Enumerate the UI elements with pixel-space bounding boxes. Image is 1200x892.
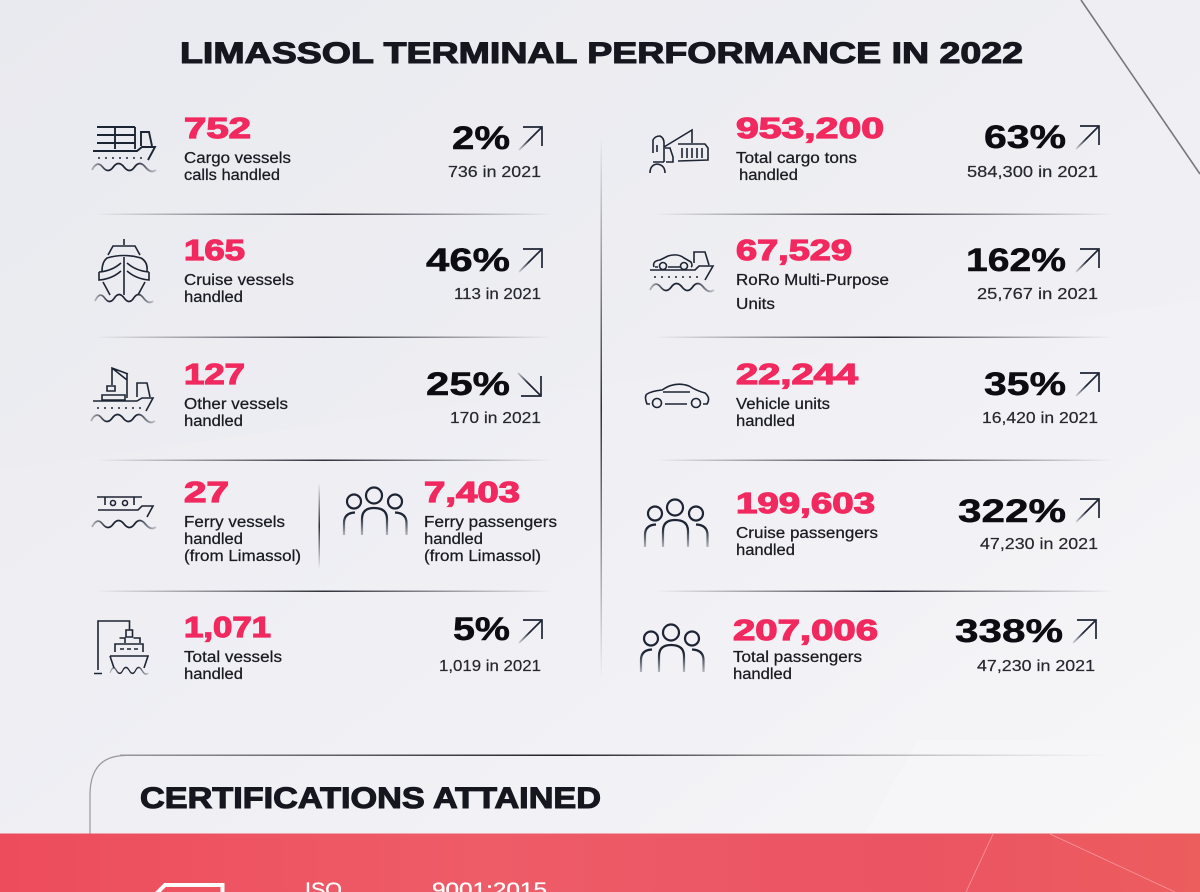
stat: vehicle units: handled bbox=[736, 413, 795, 430]
stat: cruise vessels: 46% bbox=[426, 242, 510, 278]
arrow: up bbox=[1076, 373, 1099, 396]
icon: ferry bbox=[92, 497, 156, 528]
stat: vehicle units: 35% bbox=[984, 366, 1066, 402]
arrow: up bbox=[1076, 126, 1099, 149]
stat: cargo vessels: Cargo vessels bbox=[184, 150, 291, 167]
stat: roro units: Units bbox=[736, 296, 775, 313]
icon: car bbox=[646, 384, 709, 408]
red band bbox=[0, 834, 1200, 892]
arrow: up bbox=[519, 620, 542, 643]
stat: total cargo tons: handled bbox=[739, 167, 798, 184]
stat: other vessels: 170 in 2021 bbox=[450, 410, 541, 427]
stat: roro units: 162% bbox=[966, 242, 1066, 278]
icon: people bbox=[645, 500, 708, 547]
stat: other vessels: Other vessels bbox=[184, 396, 288, 413]
stat: total passengers: Total passengers bbox=[733, 649, 862, 666]
icon: roro ship with car bbox=[650, 252, 714, 291]
stat: ferry passengers: 7,403 bbox=[424, 477, 520, 509]
stat: total vessels: 1,071 bbox=[184, 612, 271, 644]
stat: total cargo tons: Total cargo tons bbox=[736, 150, 857, 167]
stat: other vessels: handled bbox=[184, 413, 243, 430]
stat: total vessels: handled bbox=[184, 666, 243, 683]
stat: cargo vessels: 736 in 2021 bbox=[448, 164, 541, 181]
stat: total cargo tons bbox=[650, 113, 1099, 184]
stat: cruise passengers bbox=[645, 488, 1099, 559]
icon: cargo ship bbox=[92, 127, 156, 171]
stat: vehicle units: 22,244 bbox=[736, 359, 858, 391]
stat: roro units: 67,529 bbox=[736, 235, 852, 267]
stat: ferry vessels: Ferry vessels bbox=[184, 514, 285, 531]
arrow: up bbox=[1073, 620, 1096, 643]
icon: people bbox=[344, 488, 406, 535]
stat: roro units: 25,767 in 2021 bbox=[977, 286, 1098, 303]
stat: ferry passengers: handled bbox=[424, 531, 483, 548]
stat: cruise vessels: 113 in 2021 bbox=[454, 286, 541, 303]
stat: roro units bbox=[650, 235, 1099, 313]
stat: cargo vessels: calls handled bbox=[184, 167, 280, 184]
arrow: up bbox=[519, 249, 542, 272]
arrow: down bbox=[518, 373, 541, 396]
stat: vehicle units: Vehicle units bbox=[736, 396, 830, 413]
stat: cruise passengers: handled bbox=[736, 542, 795, 559]
title: LIMASSOL TERMINAL PERFORMANCE IN 2022 bbox=[180, 37, 1023, 70]
stat: total passengers: 47,230 in 2021 bbox=[977, 658, 1095, 675]
stat: ferry passengers: (from Limassol) bbox=[424, 548, 541, 565]
arrow: up bbox=[1076, 249, 1099, 272]
panel outline bbox=[90, 756, 125, 834]
stat: cruise passengers: 199,603 bbox=[736, 488, 875, 520]
stat: total vessels: 5% bbox=[453, 611, 510, 647]
stat: ferry passengers bbox=[344, 477, 557, 565]
stat: cruise passengers: Cruise passengers bbox=[736, 525, 878, 542]
stat: cruise vessels: 165 bbox=[184, 235, 245, 267]
stat: total passengers: 338% bbox=[955, 613, 1063, 649]
icon: people bbox=[641, 624, 704, 672]
icon: crane ship bbox=[91, 368, 155, 422]
stat: ferry vessels: (from Limassol) bbox=[184, 548, 301, 565]
stat: total cargo tons: 584,300 in 2021 bbox=[967, 164, 1098, 181]
certificate: ISO 9001:2015 bbox=[305, 880, 547, 892]
arrow: up bbox=[1076, 499, 1099, 522]
stat: roro units: RoRo Multi-Purpose bbox=[736, 272, 889, 289]
stat: cargo vessels: 2% bbox=[452, 120, 510, 156]
stat: total vessels: Total vessels bbox=[184, 649, 282, 666]
stat: total cargo tons: 953,200 bbox=[736, 113, 884, 145]
stat: cruise vessels bbox=[95, 235, 542, 306]
stat: total vessels bbox=[94, 611, 542, 683]
arrow: up bbox=[519, 127, 542, 150]
stat: vehicle units: 16,420 in 2021 bbox=[982, 410, 1098, 427]
panel: certifications bbox=[90, 754, 1110, 834]
stat: vehicle units bbox=[646, 359, 1099, 430]
stat: other vessels: 127 bbox=[184, 359, 245, 391]
heading: certifications attained: CERTIFICATIONS ATTAINED bbox=[140, 782, 601, 815]
stat: cruise passengers: 47,230 in 2021 bbox=[980, 536, 1098, 553]
decorative corner line bbox=[1081, 0, 1200, 174]
stat: other vessels bbox=[91, 359, 541, 430]
icon: cruise ship bbox=[95, 239, 153, 302]
icon: cargo crane bbox=[650, 130, 708, 173]
stat: total vessels: 1,019 in 2021 bbox=[439, 658, 541, 675]
stat: other vessels: 25% bbox=[426, 366, 510, 402]
stat: cargo vessels: 752 bbox=[184, 113, 251, 145]
stat: cruise vessels: Cruise vessels bbox=[184, 272, 294, 289]
stat: ferry passengers: Ferry passengers bbox=[424, 514, 557, 531]
stat: total passengers bbox=[641, 613, 1096, 683]
icon: port crane with ship bbox=[94, 621, 148, 674]
stat: ferry vessels: handled bbox=[184, 531, 243, 548]
icon: certificate badge bbox=[156, 885, 222, 892]
stat: ferry vessels: 27 bbox=[184, 477, 229, 509]
stat: cruise vessels: handled bbox=[184, 289, 243, 306]
stat: total passengers: 207,006 bbox=[733, 615, 878, 647]
stat: ferry vessels bbox=[92, 477, 301, 565]
stat: cargo vessels bbox=[92, 113, 542, 184]
stat: total cargo tons: 63% bbox=[984, 119, 1066, 155]
stat: total passengers: handled bbox=[733, 666, 792, 683]
stat: cruise passengers: 322% bbox=[958, 493, 1066, 529]
